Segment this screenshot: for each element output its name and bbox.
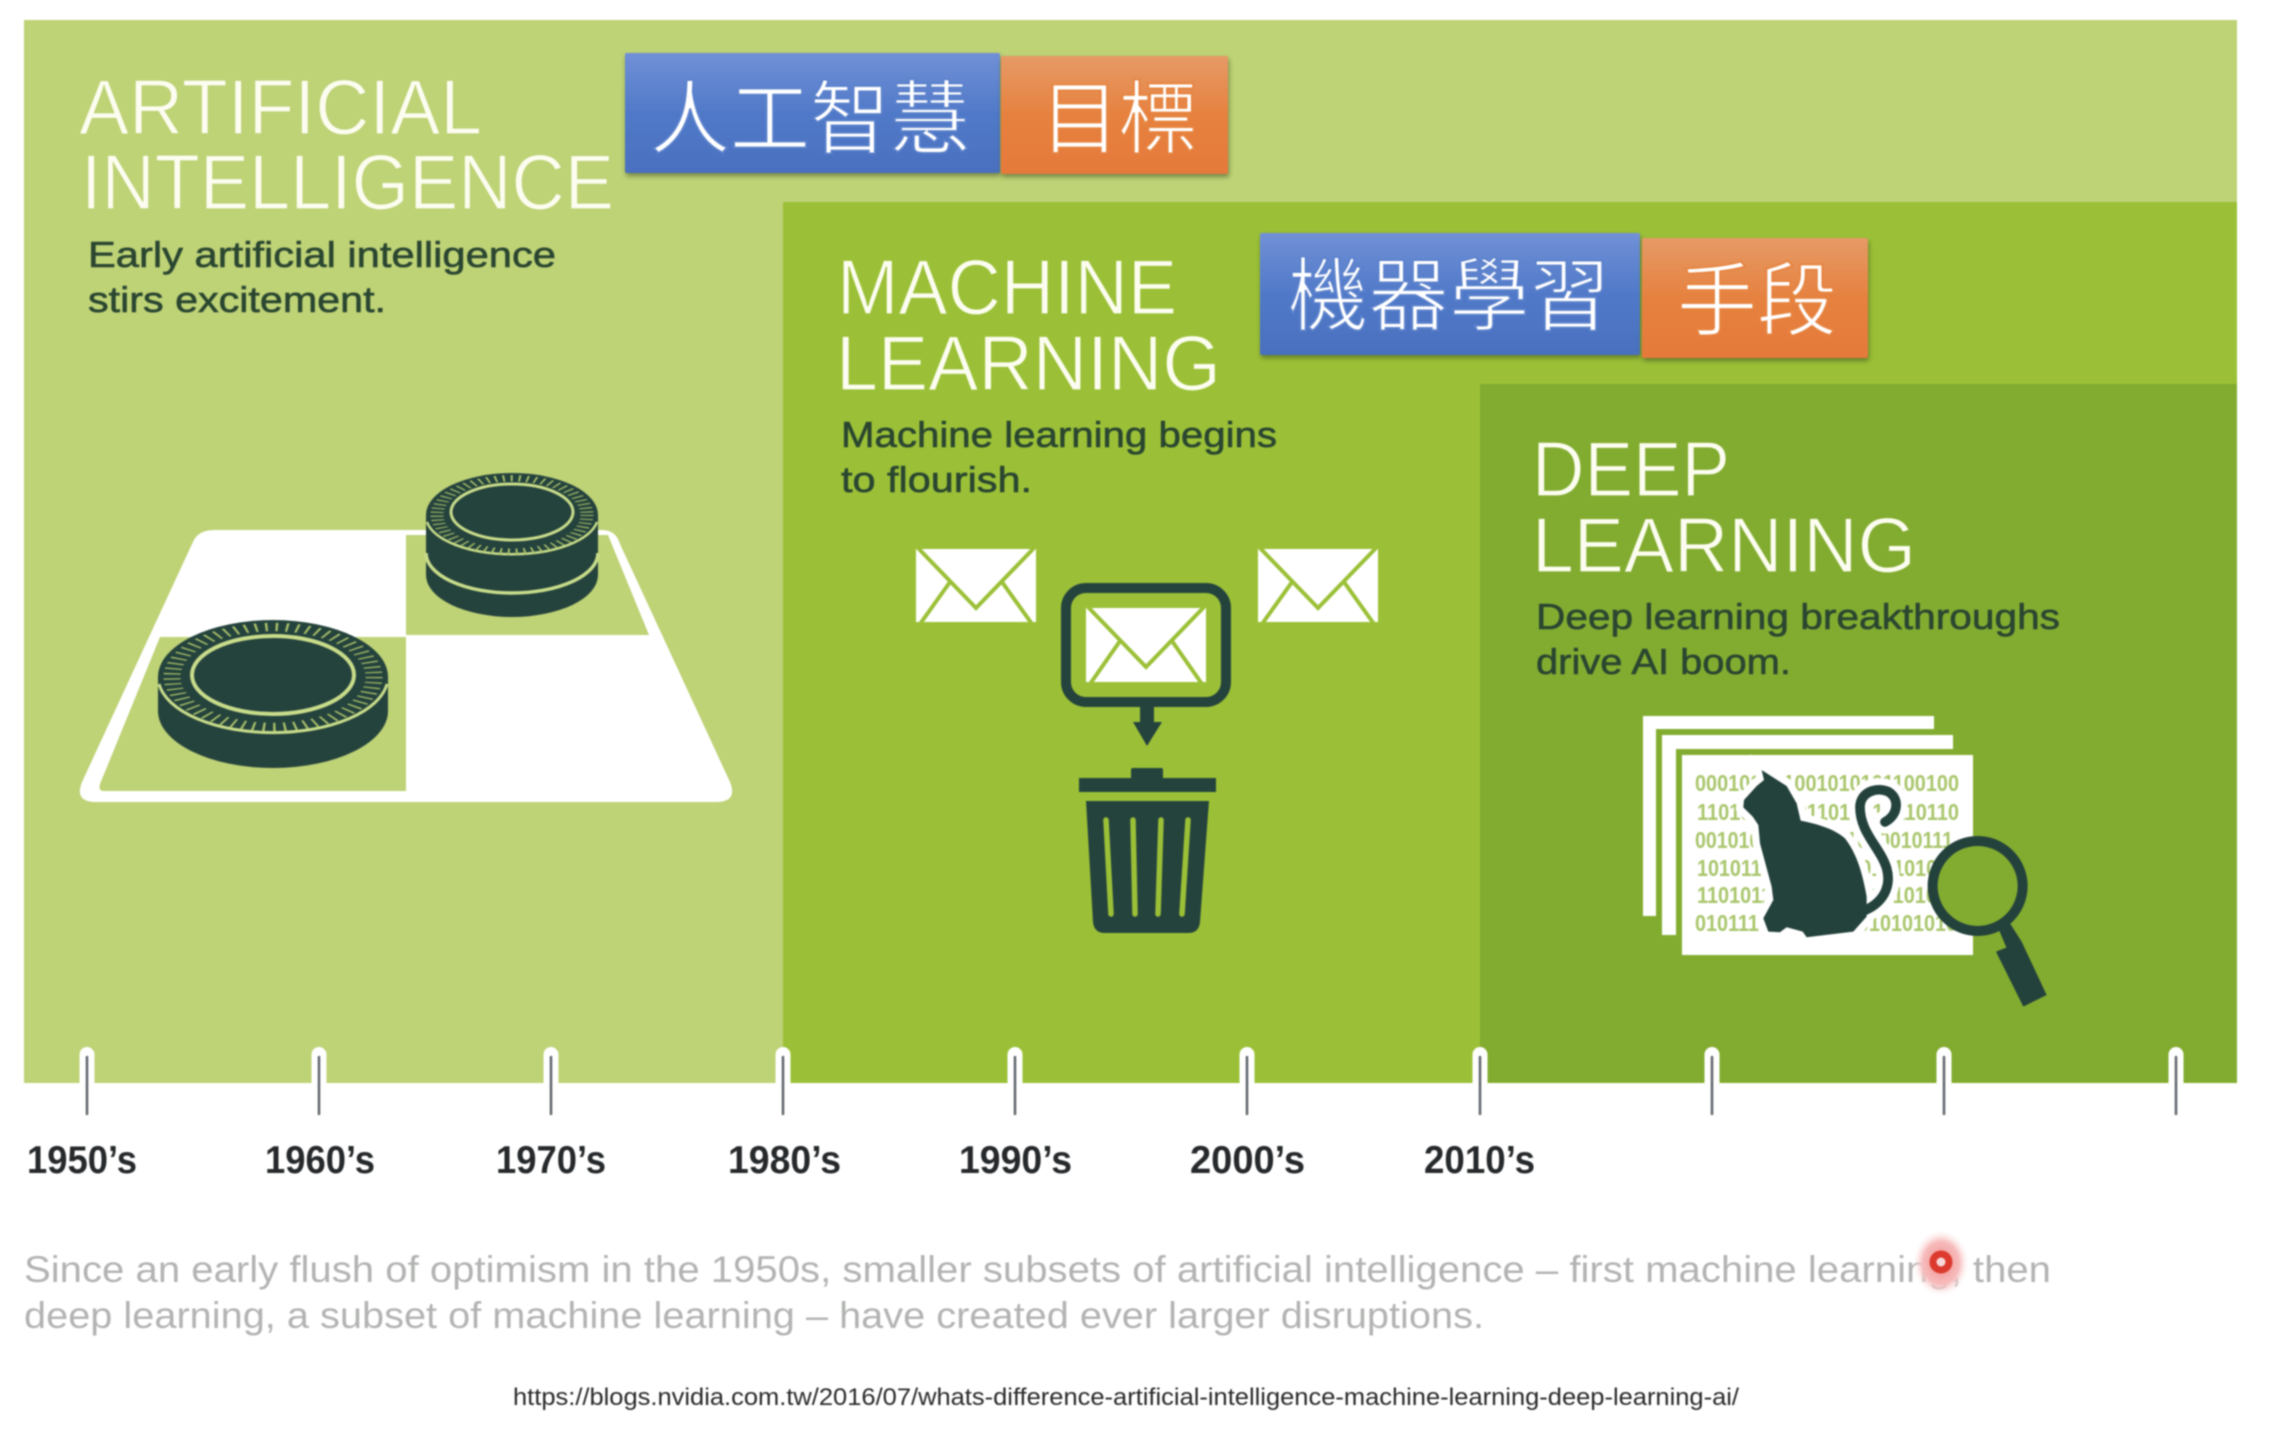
panel: artificial intelligence (24, 20, 2237, 1083)
timeline decade labels: 1990’s (959, 1139, 1072, 1182)
heading: machine learning: LEARNING (836, 319, 1221, 407)
source url: https://blogs.nvidia.com.tw/2016/07/whats-difference-artificial-intelligence-machine-learning-deep-learning-ai/ (513, 1384, 1739, 1411)
icon: single checker (158, 620, 388, 768)
icon: stacked data pages with cat (1643, 716, 2047, 1007)
text: deep learning breakthroughs (1536, 596, 2060, 682)
icon: right envelope (1258, 548, 1378, 624)
label: 人工智慧: 人工智慧 (650, 75, 970, 164)
binary digits: 010111010100101010101010 (1695, 910, 1957, 936)
text: machine learning begins (841, 414, 1277, 500)
heading: deep learning: DEEP (1532, 425, 1730, 513)
text: deep learning breakthroughs: drive AI boom. (1536, 641, 1791, 682)
panel: machine learning (783, 202, 2237, 1083)
heading: artificial intelligence: INTELLIGENCE (81, 138, 614, 226)
icon: cat silhouette (1743, 770, 1896, 937)
heading: machine learning (836, 243, 1221, 407)
caption paragraph (24, 1249, 2051, 1336)
caption paragraph: deep learning, a subset of machine learning – have created ever larger disruptions. (24, 1295, 1484, 1336)
timeline decade labels: 1950’s (27, 1139, 137, 1182)
text: early artificial intelligence: Early artificial intelligence (88, 234, 556, 275)
arrow: down to trash (1133, 706, 1162, 746)
label: 目標 (1001, 56, 1228, 174)
icon: left envelope (916, 548, 1036, 624)
label: 機器學習: 機器學習 (1288, 252, 1610, 341)
heading: deep learning: LEARNING (1532, 501, 1916, 589)
binary digits: 001010110100101010010111 (1695, 827, 1953, 853)
label: 目標: 目標 (1040, 75, 1198, 164)
cursor highlight (1913, 1230, 1969, 1296)
label: 手段: 手段 (1677, 257, 1837, 346)
text: machine learning begins: Machine learning begins (841, 414, 1277, 455)
timeline decade labels: 2010’s (1424, 1139, 1535, 1182)
label: 人工智慧 (625, 53, 1000, 173)
timeline decade labels (27, 1139, 1535, 1182)
binary digits: 110101001011010010110110 (1697, 799, 1959, 825)
timeline decade labels: 2000’s (1190, 1139, 1305, 1182)
label: 機器學習 (1260, 233, 1640, 355)
icon: checkers board (80, 473, 732, 802)
timeline ticks (80, 1047, 2184, 1115)
heading: artificial intelligence (79, 63, 614, 226)
icon: magnifying glass (1933, 841, 2047, 1007)
heading: artificial intelligence: ARTIFICIAL (79, 63, 482, 151)
binary digits: 000101001001010101100100 (1695, 770, 1959, 796)
caption paragraph: Since an early flush of optimism in the 1950s, smaller subsets of artificial intelligence – first machine learning, then (24, 1249, 2051, 1290)
text: deep learning breakthroughs: Deep learning breakthroughs (1536, 596, 2060, 637)
binary digits: 110101101001010110101010 (1697, 882, 1959, 908)
text: early artificial intelligence: stirs excitement. (88, 279, 386, 320)
timeline decade labels: 1970’s (496, 1139, 606, 1182)
text: machine learning begins: to flourish. (841, 459, 1032, 500)
text: early artificial intelligence (88, 234, 556, 320)
timeline decade labels: 1980’s (728, 1139, 841, 1182)
binary digits: 101011010010101010101010 (1697, 855, 1959, 881)
panel: deep learning (1480, 384, 2237, 1083)
icon: spam filter frame with envelope (1066, 588, 1226, 702)
label: 手段 (1642, 238, 1868, 358)
icon: trash can (1079, 768, 1216, 933)
heading: deep learning (1532, 425, 1916, 589)
heading: machine learning: MACHINE (837, 243, 1177, 331)
binary digits (1695, 770, 1959, 936)
icon: stacked checkers (426, 473, 598, 617)
timeline decade labels: 1960’s (265, 1139, 375, 1182)
